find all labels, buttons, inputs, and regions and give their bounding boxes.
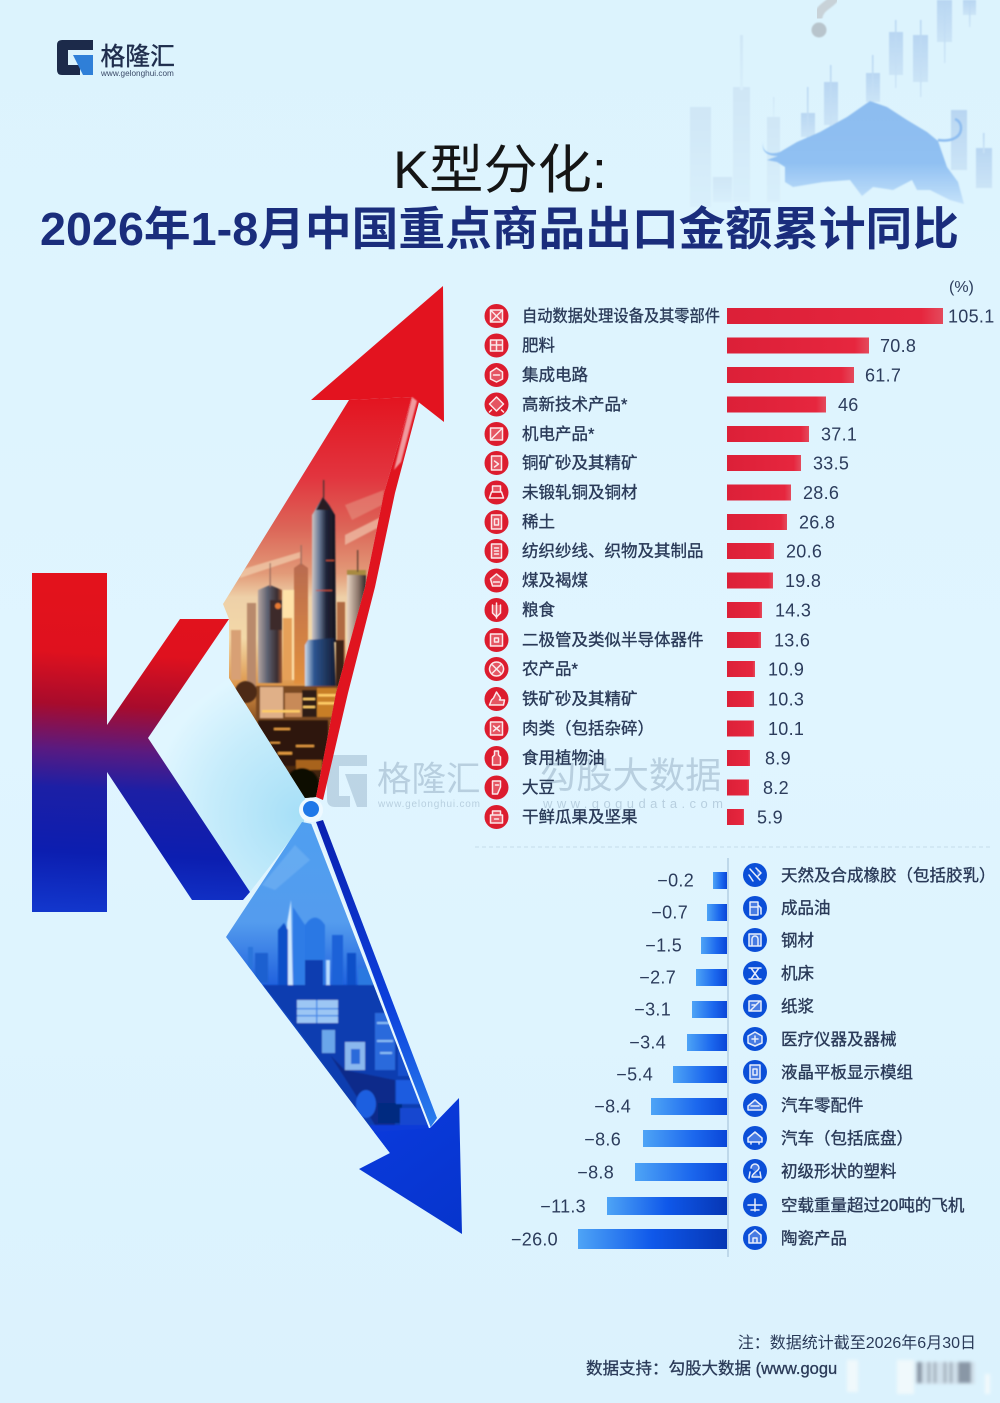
watermark [327,755,723,811]
row: 成品油 [651,896,830,922]
row: 医疗仪器及器械: 医疗仪器及器械 [781,1030,896,1049]
logo url: www.gelonghui.com [100,69,174,78]
row: 农产品*: 农产品* [522,660,578,678]
row: 高新技术产品* [484,392,859,416]
letter K [32,573,250,912]
row: 农产品* [484,657,804,681]
row: 液晶平板显示模组: −5.4 [616,1064,653,1084]
up arrow ribbon edge [316,397,419,800]
row: 初级形状的塑料: −8.8 [577,1162,614,1182]
row: 空载重量超过20吨的飞机: 空载重量超过20吨的飞机 [781,1196,965,1215]
watermark: 格隆汇 [377,761,480,799]
row: 肉类（包括杂碎） [484,716,804,740]
row: 汽车（包括底盘）: 汽车（包括底盘） [781,1129,913,1148]
row: 铁矿砂及其精矿: 铁矿砂及其精矿 [522,690,638,708]
row: 机电产品*: 37.1 [821,424,857,444]
down arrow head [359,1098,462,1234]
K arrow graphic [32,286,462,1234]
row: 干鲜瓜果及坚果: 5.9 [757,808,783,828]
row: 天然及合成橡胶（包括胶乳） [657,863,996,890]
row: 初级形状的塑料 [577,1159,896,1183]
row: 天然及合成橡胶（包括胶乳）: −0.2 [657,870,694,890]
row: 肥料: 70.8 [880,336,916,356]
row: 机床: 机床 [781,964,814,983]
row: 未锻轧铜及铜材: 未锻轧铜及铜材 [522,483,638,502]
row: 集成电路: 集成电路 [522,366,588,384]
city skyline: blue [226,822,431,1153]
watermark: 勾股大数据 [540,755,721,796]
row: 肉类（包括杂碎）: 10.1 [768,719,804,739]
row: 汽车零配件: 汽车零配件 [781,1096,864,1115]
footnote: 注：数据统计截至2026年6月30日 [738,1334,976,1352]
row: 纸浆: −3.1 [634,1000,671,1020]
decoration: candlesticks, question mark and bull [690,0,992,207]
row: 陶瓷产品 [511,1226,847,1250]
row: 陶瓷产品: −26.0 [511,1230,558,1250]
row: 纺织纱线、织物及其制品 [484,539,822,563]
data source: 数据支持：勾股大数据 (www.gogu [586,1359,837,1378]
row: 汽车零配件 [594,1093,864,1117]
row: 空载重量超过20吨的飞机: −11.3 [540,1196,586,1216]
row: 机床: −2.7 [639,968,676,988]
row: 大豆 [484,776,789,800]
row: 稀土 [484,510,835,534]
up arrow head [311,286,444,422]
row: 初级形状的塑料: 初级形状的塑料 [781,1162,896,1181]
row: 汽车（包括底盘）: −8.6 [584,1130,621,1150]
row: 肥料: 肥料 [522,336,555,355]
row: 集成电路 [484,363,901,387]
row: 铜矿砂及其精矿: 33.5 [813,454,849,474]
row: 二极管及类似半导体器件: 13.6 [774,630,810,650]
row: 煤及褐煤: 19.8 [785,571,821,591]
row: 成品油: −0.7 [651,902,688,922]
row: 纺织纱线、织物及其制品: 纺织纱线、织物及其制品 [522,542,704,560]
row: 汽车（包括底盘） [584,1126,913,1150]
row: 二极管及类似半导体器件 [484,628,810,652]
row: 空载重量超过20吨的飞机 [540,1193,965,1217]
row: 自动数据处理设备及其零部件 [484,304,995,328]
row: 干鲜瓜果及坚果 [484,805,783,829]
row: 液晶平板显示模组 [616,1060,913,1084]
row: 铜矿砂及其精矿 [484,451,849,475]
row: 医疗仪器及器械 [629,1027,896,1052]
row: 干鲜瓜果及坚果: 干鲜瓜果及坚果 [522,808,638,826]
row: 高新技术产品*: 高新技术产品* [522,395,628,414]
row: 液晶平板显示模组: 液晶平板显示模组 [781,1063,913,1082]
row: 大豆: 8.2 [763,778,789,798]
row: 煤及褐煤: 煤及褐煤 [522,571,588,590]
row: 铜矿砂及其精矿: 铜矿砂及其精矿 [522,454,638,472]
logo mark [57,40,93,75]
row: 机床 [639,961,814,988]
row: 未锻轧铜及铜材 [484,480,839,504]
row: 粮食: 14.3 [775,600,811,620]
row: 钢材 [645,928,814,956]
row: 钢材: −1.5 [645,936,682,956]
panel: decline bars [511,863,996,1250]
row: 未锻轧铜及铜材: 28.6 [803,483,839,503]
title line 2: 2026年1-8月中国重点商品出口金额累计同比 [40,203,959,255]
row: 农产品*: 10.9 [768,660,804,680]
panel: growth bars [484,304,995,829]
row: 食用植物油: 食用植物油 [522,748,604,768]
platform watermark overlay [847,1360,990,1394]
row: 陶瓷产品: 陶瓷产品 [781,1229,847,1248]
title line 1: K型分化: [393,141,607,200]
logo text: 格隆汇 [100,43,175,71]
row: 钢材: 钢材 [781,931,814,950]
down arrow strip [316,820,437,1128]
row: 煤及褐煤 [484,568,821,592]
row: 集成电路: 61.7 [865,366,901,386]
row: 铁矿砂及其精矿 [484,687,804,711]
row: 机电产品* [484,422,857,446]
row: 机电产品*: 机电产品* [522,424,595,444]
watermark: www.gogudata.com [542,796,723,811]
row: 天然及合成橡胶（包括胶乳）: 天然及合成橡胶（包括胶乳） [781,866,996,885]
row: 成品油: 成品油 [781,898,830,918]
row: 高新技术产品*: 46 [838,395,859,415]
row: 食用植物油: 8.9 [765,748,791,768]
logo [57,40,175,78]
row: 医疗仪器及器械: −3.4 [629,1032,666,1052]
unit label: (%) [949,279,974,296]
row: 铁矿砂及其精矿: 10.3 [768,690,804,710]
row: 自动数据处理设备及其零部件: 105.1 [948,306,995,326]
row: 肥料 [484,334,916,358]
pivot dot [299,798,323,822]
row: 粮食 [484,598,811,622]
title [40,141,959,255]
city skyline: sunrise [223,397,412,798]
row: 纸浆 [634,994,814,1020]
row: 汽车零配件: −8.4 [594,1096,631,1116]
down arrow white line [312,823,430,1128]
row: 二极管及类似半导体器件: 二极管及类似半导体器件 [522,630,704,650]
row: 自动数据处理设备及其零部件: 自动数据处理设备及其零部件 [522,306,720,326]
row: 粮食: 粮食 [522,600,556,620]
down arrow [220,815,462,1234]
row: 肉类（包括杂碎）: 肉类（包括杂碎） [522,719,654,738]
glow between K and arrows [148,678,305,892]
watermark: www.gelonghui.com [377,799,480,810]
row: 大豆: 大豆 [522,778,555,797]
row: 稀土: 26.8 [799,512,835,532]
row: 稀土: 稀土 [522,512,555,532]
row: 纺织纱线、织物及其制品: 20.6 [786,542,822,562]
up arrow [215,286,444,805]
row: 纸浆: 纸浆 [781,997,814,1016]
row: 食用植物油 [484,746,791,770]
